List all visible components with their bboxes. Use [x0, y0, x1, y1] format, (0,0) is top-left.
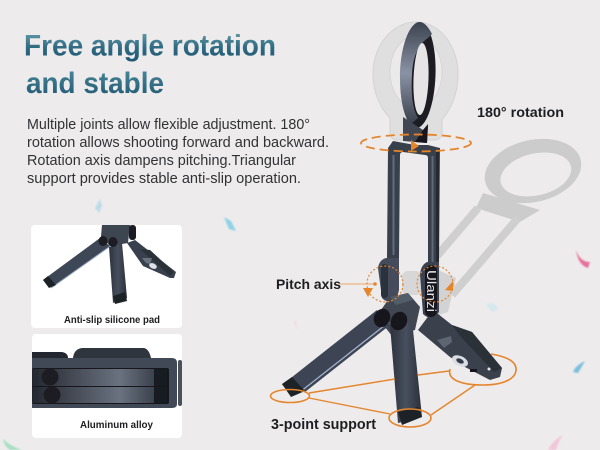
description text: Multiple joints allow flexible adjustment. 180°: [27, 116, 310, 133]
main stand: right lobe with logo: Ulanzi: [424, 270, 438, 312]
main stand: magnetic ring: [399, 21, 437, 143]
title: [24, 30, 276, 100]
callout: pitch axis: Pitch axis: [276, 276, 341, 292]
main stand: left leg: [282, 306, 393, 397]
main stand: U frame: [378, 141, 440, 302]
description text: Rotation axis dampens pitching.Triangular: [27, 152, 296, 169]
callout: 3-point support: 3-point support: [271, 417, 376, 433]
main stand: right folded leg: [418, 310, 502, 380]
icon: folded tripod legs: [43, 225, 176, 304]
panel: anti-slip silicone pad: [31, 225, 182, 328]
caption: Anti-slip silicone pad: [64, 314, 160, 326]
ghost ring: rotated position behind: [373, 22, 458, 140]
icon: aluminum stand close-up: Ulanzi: [38, 356, 56, 363]
main stand: hub: [381, 293, 420, 336]
callout: 180 degree rotation: [361, 104, 564, 152]
description text: support provides stable anti-slip operation.: [27, 170, 301, 187]
confetti decorations: [3, 199, 590, 450]
description text: rotation allows shooting forward and backward.: [27, 134, 329, 151]
main stand: right lobe with logo: [420, 262, 439, 318]
callout: 180 degree rotation: 180° rotation: [477, 104, 564, 120]
caption: Aluminum alloy: [80, 419, 153, 431]
main stand: centre leg: [388, 309, 422, 425]
icon: aluminum stand close-up: [32, 348, 182, 408]
callout: pitch axis: [276, 266, 453, 302]
title: and stable: [26, 67, 164, 100]
panel: aluminum alloy: [32, 334, 182, 438]
callout: 3-point support: [270, 354, 516, 433]
title: Free angle rotation: [24, 30, 276, 62]
description text: [27, 116, 329, 187]
ghost stand: tilted position: [402, 130, 588, 316]
